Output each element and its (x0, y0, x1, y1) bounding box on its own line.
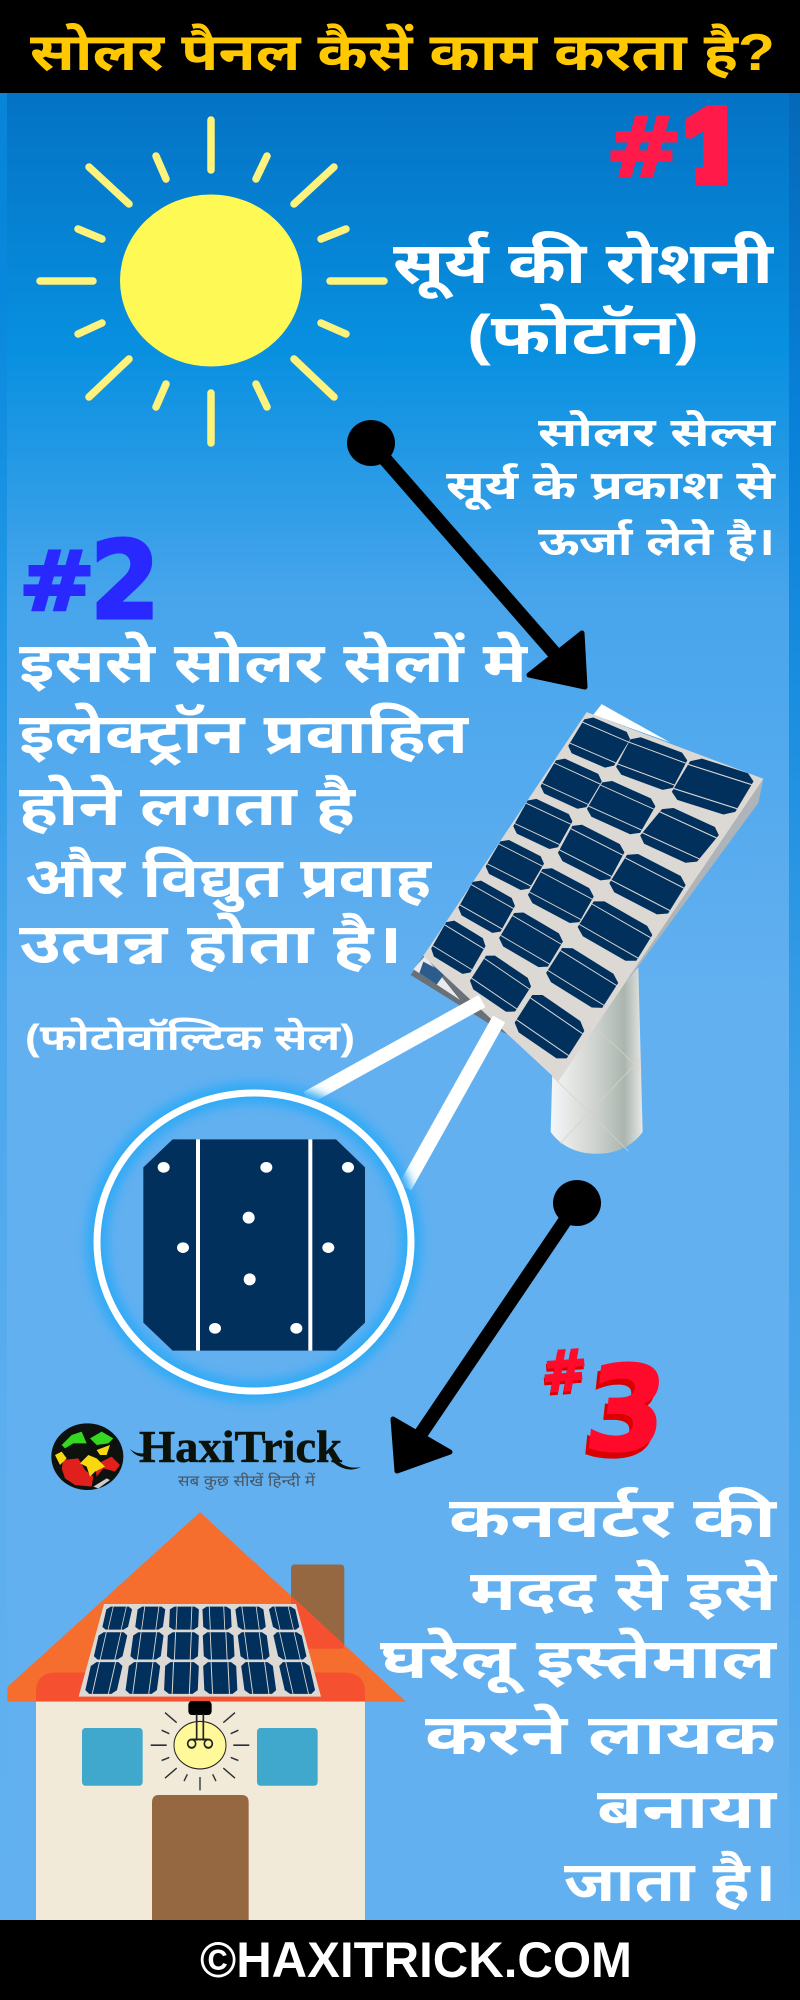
step number 3: 3 (579, 1340, 674, 1478)
text: converter makes it usable at home: घरेलू इस्तेमाल (380, 1627, 778, 1694)
heading: sunlight (393, 231, 774, 366)
rooftop solar panel (79, 1604, 321, 1697)
house wall (36, 1702, 365, 1922)
text: converter makes it usable at home (380, 1486, 778, 1913)
callout: magnified solar cell (97, 1093, 411, 1391)
step number 3: 3 (575, 1346, 670, 1484)
title: सोलर पैनल कैसें काम करता है? (30, 23, 775, 82)
footer bar (0, 1920, 800, 2000)
footer website: ©HAXITRICK.COM (200, 1932, 632, 1988)
step number 1: 1 (683, 88, 743, 206)
text: converter makes it usable at home: मदद से इसे (470, 1559, 778, 1622)
chimney (291, 1565, 344, 1649)
icon: solar panel on pole (411, 704, 763, 1154)
text: electrons flow (19, 631, 529, 975)
right window (257, 1728, 318, 1786)
step number 2: # (19, 535, 95, 630)
logo tagline: सब कुछ सीखें हिन्दी में (178, 1472, 316, 1491)
text: converter makes it usable at home: बनाया (597, 1777, 778, 1840)
header bar (0, 0, 800, 93)
text: electrons flow: इलेक्ट्रॉन प्रवाहित (19, 702, 470, 766)
solar cells (429, 715, 757, 1063)
text: electrons flow: होने लगता है (19, 774, 357, 837)
text: solar cells take energy: सूर्य के प्रकाश से (446, 463, 777, 510)
door (152, 1795, 249, 1922)
step number 2 (19, 519, 160, 644)
step number 1 (610, 105, 727, 185)
panel face (423, 712, 763, 1081)
text: electrons flow: इससे सोलर सेलों मे (19, 631, 529, 694)
step number 1: # (606, 101, 682, 196)
heading: sunlight: सूर्य की रोशनी (393, 231, 774, 300)
text: solar cells take energy (446, 410, 777, 564)
icon: light bulb (151, 1701, 249, 1790)
step number 3: # (539, 1341, 589, 1409)
step number 3 (538, 1338, 674, 1484)
panel back frame (411, 704, 763, 1048)
text: electrons flow: और विद्युत प्रवाह (25, 846, 432, 913)
text: solar cells take energy: सोलर सेल्स (538, 410, 777, 455)
pole (551, 967, 643, 1154)
logo: HaxiTrick (51, 1421, 361, 1491)
text: converter makes it usable at home: जाता है। (564, 1850, 776, 1913)
logo globe (51, 1423, 123, 1490)
label: photovoltaic cell: (फोटोवॉल्टिक सेल) (25, 1016, 355, 1058)
text: converter makes it usable at home: कनवर्टर की (449, 1486, 778, 1549)
roof (7, 1512, 406, 1702)
step number 3: # (539, 1338, 590, 1406)
callout: lines to magnified cell (307, 1001, 499, 1187)
logo wordmark: HaxiTrick (139, 1421, 342, 1472)
step number 2: 2 (90, 519, 160, 644)
icon: sun (40, 120, 384, 443)
left window (82, 1728, 143, 1786)
arrow: sun to panel (347, 420, 585, 687)
icon: house with rooftop solar (7, 1512, 406, 1922)
text: electrons flow: उत्पन्न होता है। (19, 912, 402, 975)
text: converter makes it usable at home: करने लायक (425, 1703, 778, 1766)
heading: sunlight: (फोटॉन) (467, 303, 699, 366)
text: solar cells take energy: ऊर्जा लेते है। (538, 518, 775, 564)
arrow: panel to house (393, 1180, 601, 1471)
